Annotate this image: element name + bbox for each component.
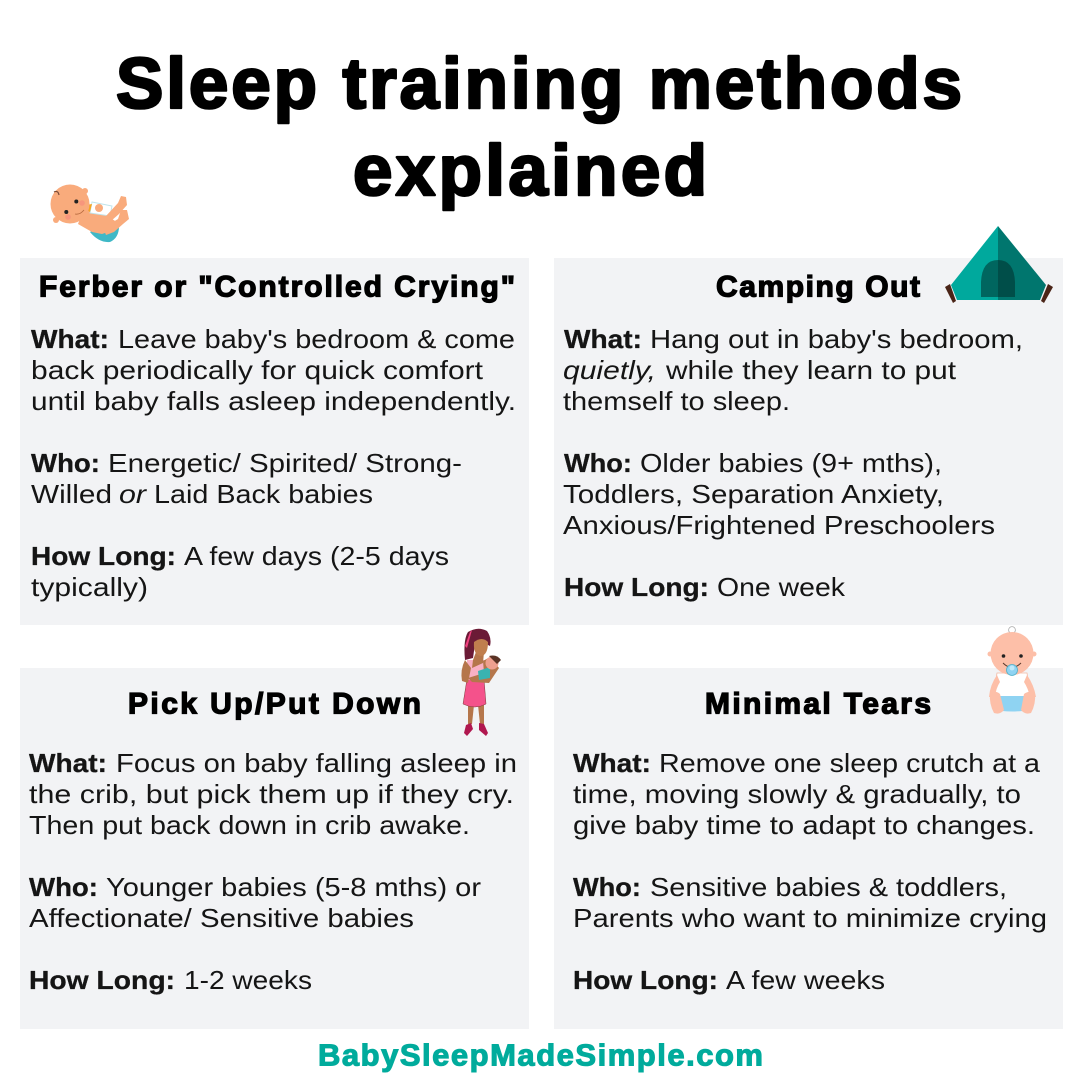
text block: Camping who: Older babies (9+ mths), (640, 448, 942, 478)
text block: Minimal who: Parents who want to minimize crying (573, 903, 1047, 933)
text block: Ferber what: Leave baby's bedroom & come (118, 324, 515, 354)
text block: Minimal who: Who: (573, 872, 641, 902)
text block: Ferber how long (31, 541, 449, 602)
text block: Pick up what: the crib, but pick them up if they cry. (29, 779, 514, 809)
text block: Camping who: Who: (564, 448, 632, 478)
text block: Camping who: Toddlers, Separation Anxiety, (563, 479, 944, 509)
text block: Pick up what: Focus on baby falling asleep in (116, 748, 517, 778)
text block: Pick up what: What: (29, 748, 107, 778)
text block: Ferber who: or (119, 479, 148, 509)
text block: Camping what: themself to sleep. (563, 386, 790, 416)
text block: Ferber who: Who: (31, 448, 100, 478)
panel: Ferber or Controlled Crying (20, 258, 529, 625)
text block: Minimal what: What: (573, 748, 651, 778)
text block: Ferber how long: A few days (2-5 days (184, 541, 449, 571)
text block: Ferber who (31, 448, 462, 509)
heading: Ferber: Ferber or "Controlled Crying" (39, 270, 515, 304)
text block: Pick up who (29, 872, 481, 933)
text block: Minimal what (573, 748, 1041, 840)
panel: Minimal Tears (554, 668, 1063, 1029)
text block: Camping what (563, 324, 1023, 416)
heading: Camping Out: Camping Out (716, 270, 920, 304)
icon: baby with bottle (50, 184, 129, 242)
text block: Ferber who: Willed (31, 479, 112, 509)
title (116, 45, 962, 211)
text block: Camping what: quietly, (563, 355, 656, 385)
text block: Ferber what: until baby falls asleep independently. (31, 386, 516, 416)
text block: Ferber what: What: (31, 324, 109, 354)
text block: Pick up how long: How Long: (29, 965, 175, 995)
text block: Minimal how long (573, 965, 885, 995)
icon: tent (945, 226, 1053, 303)
text block: Pick up who: Affectionate/ Sensitive babies (29, 903, 414, 933)
text block: Camping who (563, 448, 995, 540)
text block: Minimal who: Sensitive babies & toddlers, (650, 872, 1007, 902)
text block: Camping how long: How Long: (564, 572, 709, 602)
text block: Camping what: while they learn to put (665, 355, 957, 385)
title: explained (353, 132, 707, 211)
text block: Minimal who (573, 872, 1047, 933)
text block: Ferber who: Laid Back babies (154, 479, 373, 509)
icon: mother holding baby (461, 629, 501, 736)
text block: Camping how long (564, 572, 846, 602)
text block: Ferber what: back periodically for quick comfort (31, 355, 484, 385)
text block: Pick up what (29, 748, 517, 840)
text block: Ferber how long: How Long: (31, 541, 176, 571)
text block: Camping how long: One week (717, 572, 846, 602)
title: Sleep training methods (116, 45, 962, 124)
panel: Pick Up/Put Down (20, 668, 529, 1029)
heading: Minimal Tears: Minimal Tears (705, 688, 931, 720)
text block: Minimal how long: How Long: (573, 965, 718, 995)
text block: Ferber what (31, 324, 516, 416)
text block: Ferber who: Energetic/ Spirited/ Strong- (108, 448, 462, 478)
text block: Pick up what: Then put back down in crib awake. (29, 810, 470, 840)
panel: Camping Out (554, 258, 1063, 625)
footer: website: BabySleepMadeSimple.com (318, 1038, 763, 1072)
icon: baby with pacifier (988, 627, 1036, 714)
text block: Pick up who: Younger babies (5-8 mths) or (106, 872, 481, 902)
heading: Pick Up/Put Down: Pick Up/Put Down (128, 688, 421, 720)
text block: Camping what: What: (564, 324, 642, 354)
text block: Minimal what: give baby time to adapt to changes. (573, 810, 1035, 840)
text block: Camping what: Hang out in baby's bedroom, (650, 324, 1023, 354)
text block: Minimal what: time, moving slowly & gradually, to (573, 779, 1021, 809)
text block: Camping who: Anxious/Frightened Preschoolers (563, 510, 995, 540)
text block: Pick up how long (29, 965, 312, 995)
text block: Minimal how long: A few weeks (726, 965, 885, 995)
text block: Minimal what: Remove one sleep crutch at a (659, 748, 1041, 778)
text block: Pick up who: Who: (29, 872, 98, 902)
text block: Ferber how long: typically) (31, 572, 148, 602)
text block: Pick up how long: 1-2 weeks (184, 965, 312, 995)
